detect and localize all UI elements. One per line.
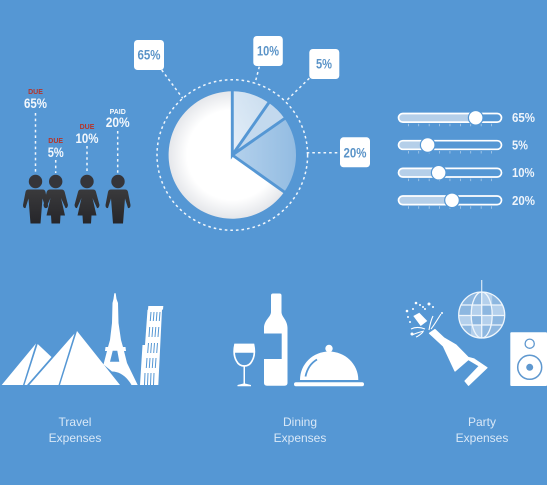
icon: wine bottle [264,294,288,386]
icon: wine glass [234,344,254,386]
callout: 20%: 20% [344,146,366,160]
callout: 65%: 65% [138,48,160,62]
person 4: paid 20%: 20% [106,115,130,130]
person 3: due 10%: 10% [76,131,98,146]
slider 20%: 20% [512,194,535,208]
icon: party [406,280,547,386]
person 2: due 5%: DUE [48,138,63,145]
slider 10%: 10% [512,166,534,180]
caption: travel expenses: Expenses [49,431,101,445]
panel: sliders [398,110,535,208]
icon: disco ball [459,280,505,339]
callout: 20% [307,137,370,167]
person 2: due 5%: 5% [48,145,64,160]
caption: dining expenses: Dining [283,415,317,429]
caption: travel expenses: Travel [59,415,91,429]
icon: champagne bottle [430,330,487,385]
person 1: due 65%: 65% [24,96,47,111]
panel: pie chart with callouts [134,36,370,230]
caption: party expenses: Expenses [456,431,508,445]
caption: dining expenses: Expenses [274,431,326,445]
callout: 65% [134,40,183,98]
pie chart [169,90,296,219]
person 4: paid 20%: PAID [110,109,126,116]
caption: party expenses: Party [468,415,496,429]
icon: dining [234,294,364,386]
icon: eiffel tower [104,293,138,385]
icon: leaning tower of pisa [140,306,163,385]
slider 65%: 65% [512,111,535,125]
callout: 5% [286,49,339,101]
icon: cork and confetti [406,302,443,337]
person 1: due 65% [23,89,48,224]
panel: people with due and paid shares [23,89,130,224]
callout: 10%: 10% [257,44,279,58]
callout: 5%: 5% [316,56,332,72]
person 1: due 65%: DUE [28,89,43,96]
callout: 10% [253,36,283,83]
icon: large pyramid [29,331,120,385]
person 3: due 10% [74,124,100,224]
dashed ring [157,80,308,230]
icon: small pyramid [2,344,51,385]
icon: travel landmarks [2,293,163,385]
person 4: paid 20% [106,109,130,224]
person 3: due 10%: DUE [80,124,95,131]
person 2: due 5% [44,138,68,224]
slider 5%: 5% [512,138,528,152]
icon: speaker [510,332,547,386]
icon: cloche [294,345,364,386]
